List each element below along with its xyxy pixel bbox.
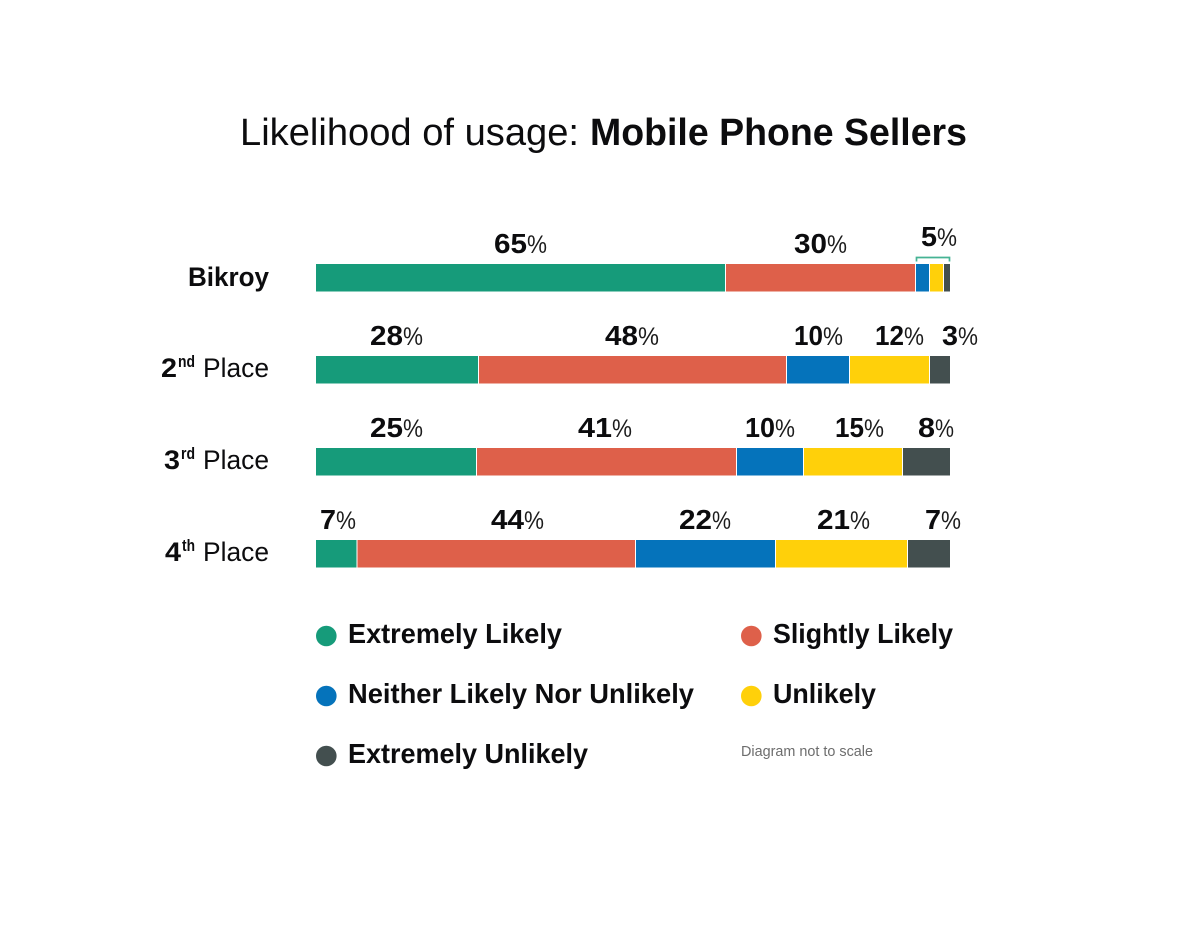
values: Bikroy: 5 [921,221,937,252]
title: Likelihood of usage: [240,112,579,154]
values: Bikroy: % [937,224,957,252]
legend [316,618,953,769]
row label: 3rd Place: 3 [164,445,180,475]
row label: 4th Place: th [182,536,195,555]
values: 2nd Place: 28 [370,320,403,351]
values: Bikroy: 65 [494,228,527,259]
values: 2nd Place: 48 [605,320,638,351]
row label: 2nd Place [161,352,269,383]
values: 2nd Place: % [904,323,924,351]
title [240,112,967,154]
values: Bikroy: 30 [794,228,827,259]
values: Bikroy: % [527,231,547,259]
legend item: Extremely Unlikely: Extremely Unlikely [348,738,588,769]
row label: Bikroy: Bikroy [188,262,269,292]
row label: 2nd Place: Place [203,353,269,383]
legend item: Neither Likely Nor Unlikely: Neither Likely Nor Unlikely [348,678,694,709]
values: 3rd Place: % [775,415,795,443]
values: 3rd Place: % [612,415,632,443]
values: 2nd Place: 10 [794,320,823,351]
values: 3rd Place: 8 [918,412,935,443]
values: 2nd Place: % [958,323,978,351]
legend item: Extremely Likely: Extremely Likely [348,618,562,649]
values: 3rd Place: 10 [745,412,775,443]
row label: 2nd Place: 2 [161,353,177,383]
values: 2nd Place [370,320,978,351]
values: 3rd Place: % [864,415,884,443]
values: 3rd Place: % [935,415,954,443]
stacked bar: Bikroy [316,264,950,292]
values: 4th Place: % [712,507,731,535]
values: 3rd Place [370,412,954,443]
row label: 4th Place [165,536,269,567]
values: 2nd Place: % [638,323,659,351]
values: 4th Place: 21 [817,504,850,535]
row label: 3rd Place [164,444,269,475]
values: 4th Place: % [941,507,961,535]
values: 3rd Place: 41 [578,412,612,443]
values: 3rd Place: % [403,415,423,443]
row label: 3rd Place: rd [181,444,195,463]
row label: 3rd Place: Place [203,445,269,475]
values: 4th Place: 7 [320,504,336,535]
legend item: Slightly Likely: Slightly Likely [773,618,953,649]
legend item: Unlikely: Unlikely [773,678,876,709]
values: 3rd Place: 25 [370,412,403,443]
stacked bar: 3rd Place [316,448,950,476]
values: 2nd Place: % [823,323,843,351]
row label: 4th Place: 4 [165,537,181,567]
values: 4th Place [320,504,961,535]
bracket: 5% grouping [916,258,950,262]
values: Bikroy: % [827,231,847,259]
values: 2nd Place: 12 [875,320,904,351]
values: Bikroy [494,221,957,259]
values: 4th Place: 22 [679,504,712,535]
title: Mobile Phone Sellers [590,112,967,154]
row label: 4th Place: Place [203,537,269,567]
values: 2nd Place: % [403,323,423,351]
stacked bar: 2nd Place [316,356,950,384]
footnote: Diagram not to scale [741,744,873,760]
stacked bar: 4th Place [316,540,950,568]
values: 3rd Place: 15 [835,412,864,443]
values: 4th Place: 44 [491,504,524,535]
values: 4th Place: % [524,507,544,535]
values: 2nd Place: 3 [942,320,958,351]
row label: 2nd Place: nd [178,352,195,371]
values: 4th Place: % [336,507,356,535]
values: 4th Place: 7 [925,504,941,535]
values: 4th Place: % [850,507,870,535]
